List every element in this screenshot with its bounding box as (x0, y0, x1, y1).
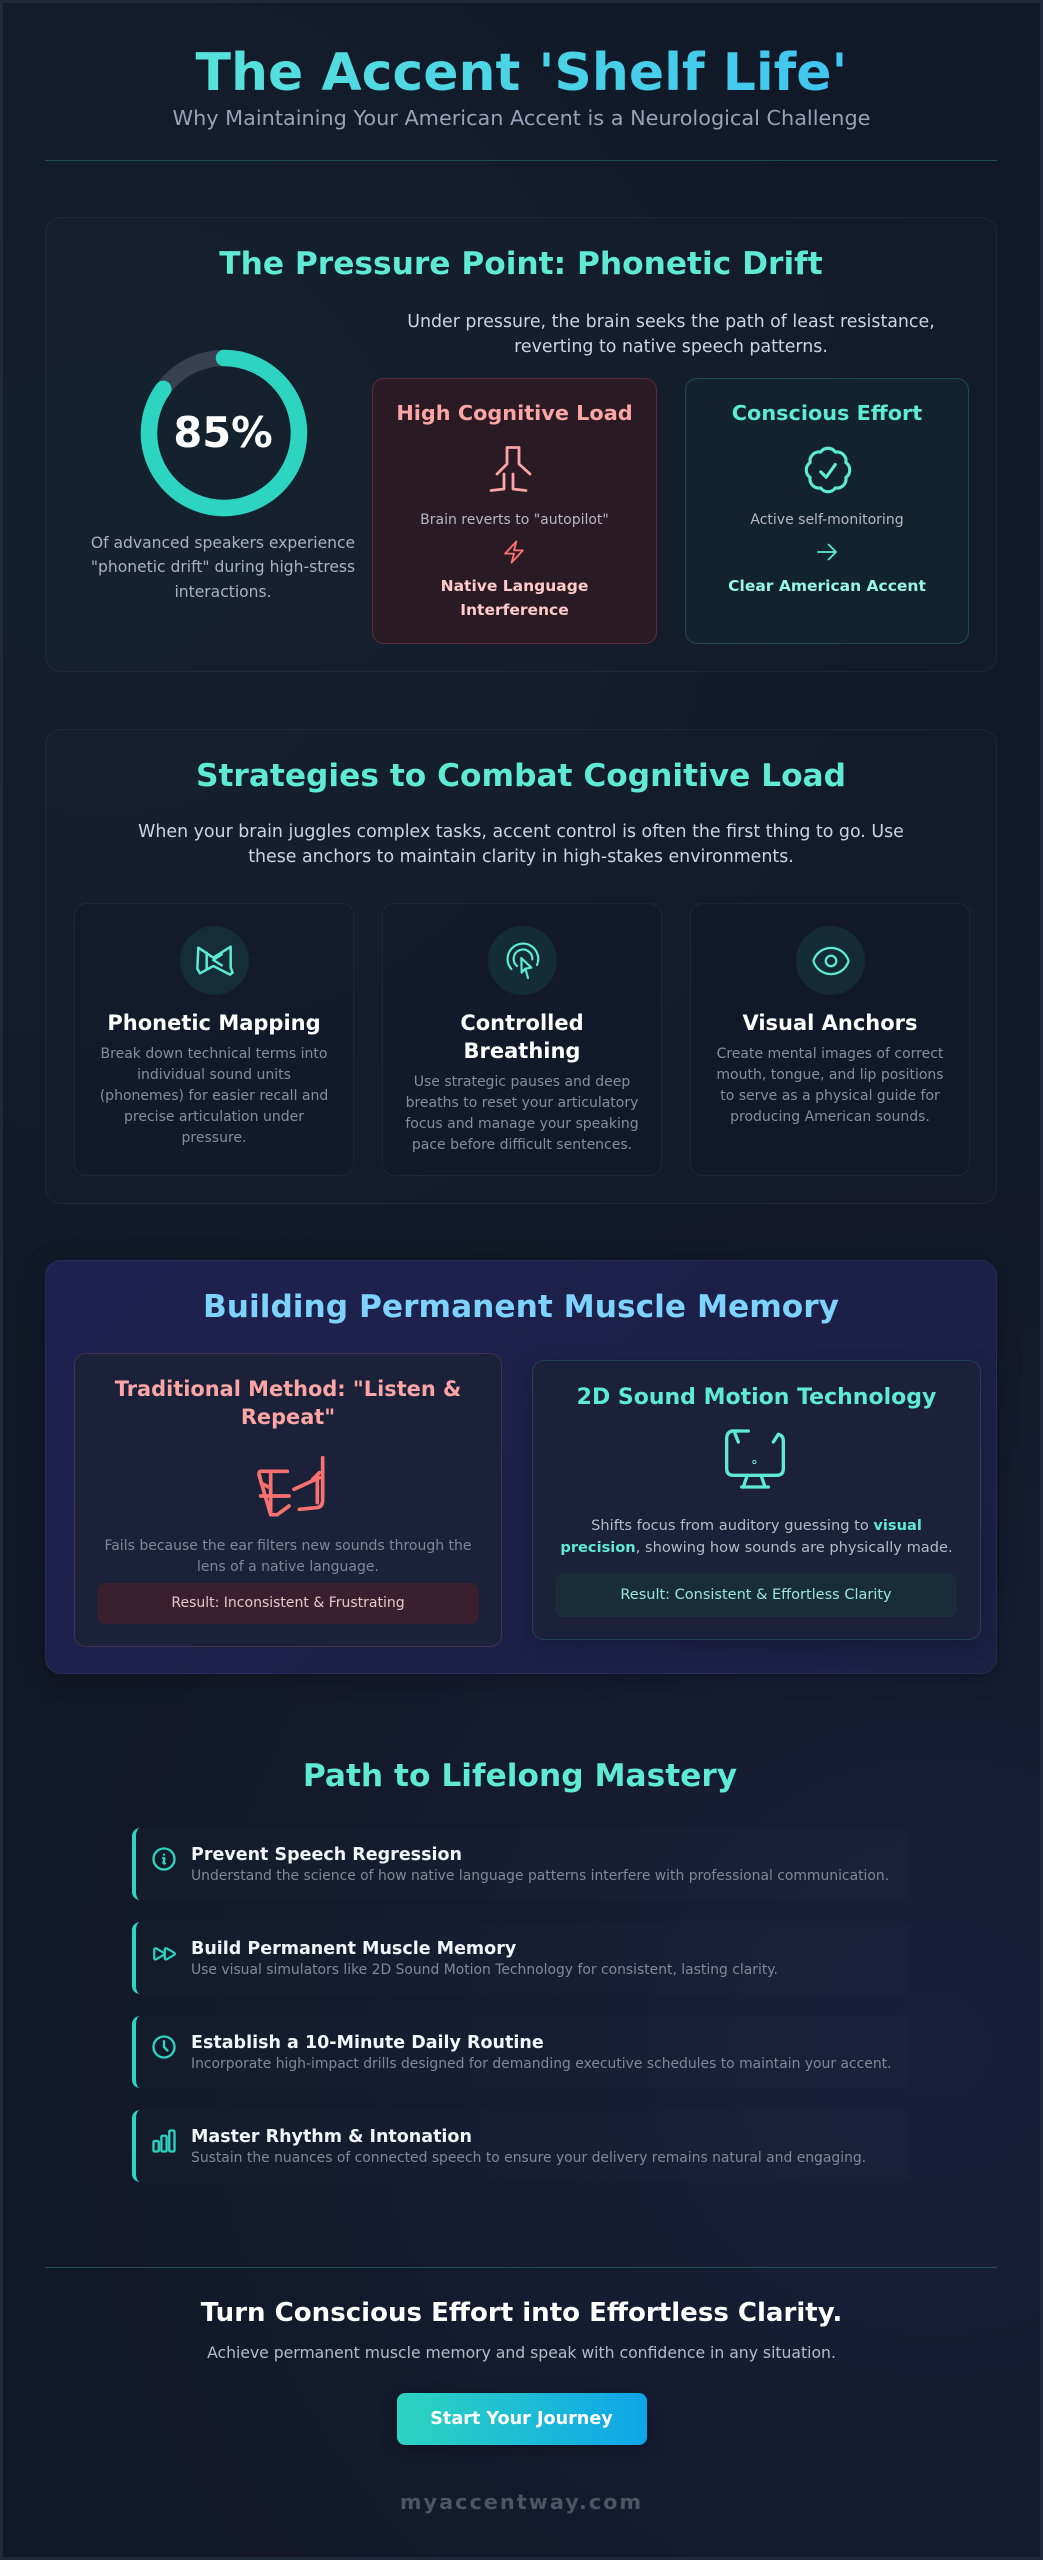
donut chart: 85% (140, 350, 308, 516)
icon: bolt (504, 540, 524, 564)
item title: Prevent Speech Regression (191, 1845, 462, 1865)
card description: pace before difficult sentences. (412, 1137, 632, 1153)
card description: focus and manage your speaking (405, 1116, 639, 1132)
button: start your journey: Start Your Journey (430, 2409, 613, 2429)
card description: Fails because the ear filters new sounds through the (104, 1538, 472, 1554)
result badge: Result: Inconsistent & Frustrating (171, 1595, 405, 1611)
card: conscious effort (685, 378, 969, 644)
card title (460, 1011, 584, 1063)
card description: Break down technical terms into (101, 1046, 327, 1062)
icon: cursor rays (488, 926, 557, 995)
card text: Active self-monitoring (750, 512, 904, 528)
card title: Visual Anchors (742, 1011, 918, 1035)
intro text: reverting to native speech patterns. (514, 336, 828, 356)
card description: to serve as a physical guide for (720, 1088, 940, 1104)
card description: Use strategic pauses and deep (414, 1074, 630, 1090)
card outcome: Interference (460, 601, 569, 619)
intro text: these anchors to maintain clarity in high-stakes environments. (248, 847, 794, 867)
card description: Shifts focus from auditory guessing to visual (591, 1517, 922, 1534)
item description: Sustain the nuances of connected speech to ensure your delivery remains natural and engaging. (191, 2150, 866, 2166)
icon: map (180, 926, 249, 995)
card outcome: Native Language (441, 577, 588, 595)
card description: pressure. (182, 1130, 246, 1146)
item title: Build Permanent Muscle Memory (191, 1939, 516, 1959)
icon: check badge (804, 446, 852, 494)
result badge: Result: Consistent & Effortless Clarity (620, 1587, 892, 1603)
list item: rhythm (132, 2110, 910, 2182)
card heading (114, 1377, 461, 1429)
donut caption: "phonetic drift" during high-stress (91, 558, 355, 576)
donut chart: 85%: 85% (173, 408, 273, 457)
card description: precision, showing how sounds are physically made. (560, 1539, 953, 1556)
panel: strategies (45, 729, 997, 1204)
card description: individual sound units (137, 1067, 291, 1083)
result badge (97, 1583, 479, 1624)
card title: Phonetic Mapping (107, 1011, 321, 1035)
card: phonetic mapping (74, 903, 354, 1176)
card description (104, 1538, 472, 1575)
card description: producing American sounds. (730, 1109, 930, 1125)
card description: mouth, tongue, and lip positions (716, 1067, 944, 1083)
item description: Use visual simulators like 2D Sound Motion Technology for consistent, lasting clarity. (191, 1962, 778, 1978)
card description: Create mental images of correct (717, 1046, 943, 1062)
panel: the pressure point (45, 217, 997, 672)
card description: lens of a native language. (197, 1559, 379, 1575)
card description (100, 1046, 328, 1146)
card heading: Conscious Effort (732, 401, 922, 425)
footer heading: Turn Conscious Effort into Effortless Clarity. (201, 2298, 842, 2328)
card description: (phonemes) for easier recall and (100, 1088, 328, 1104)
card description: precise articulation under (124, 1109, 304, 1125)
subtitle: Why Maintaining Your American Accent is a Neurological Challenge (173, 106, 870, 130)
heading: path to mastery: Path to Lifelong Mastery (303, 1758, 737, 1794)
list item: daily routine (132, 2016, 910, 2088)
icon: chart bars (152, 2129, 176, 2153)
card heading: High Cognitive Load (396, 401, 633, 425)
icon: forward (153, 1947, 176, 1960)
icon: monitor (725, 1429, 785, 1489)
card: visual anchors (690, 903, 970, 1176)
card: high cognitive load (372, 378, 657, 644)
card outcome (441, 577, 588, 619)
donut caption: interactions. (174, 583, 272, 601)
list item: prevent regression (132, 1828, 910, 1900)
card: 2d sound motion (532, 1360, 981, 1640)
result badge (555, 1573, 957, 1617)
intro text (407, 312, 935, 356)
card title: Breathing (464, 1039, 580, 1063)
card heading: 2D Sound Motion Technology (577, 1385, 936, 1410)
footer text: Achieve permanent muscle memory and speak with confidence in any situation. (207, 2343, 836, 2362)
icon: clock (152, 2035, 176, 2059)
heading: muscle memory: Building Permanent Muscle Memory (203, 1289, 839, 1325)
website domain: myaccentway.com (400, 2490, 643, 2514)
donut caption (91, 534, 355, 601)
card: controlled breathing (382, 903, 662, 1176)
card title: Controlled (460, 1011, 584, 1035)
icon: airways (490, 446, 532, 492)
panel: muscle memory (45, 1260, 997, 1674)
card text: Brain reverts to "autopilot" (420, 512, 609, 528)
item description: Understand the science of how native language patterns interfere with professional communication. (191, 1868, 889, 1884)
card description (716, 1046, 944, 1125)
icon: info (152, 1847, 176, 1871)
intro text: When your brain juggles complex tasks, accent control is often the first thing to go. Use (138, 822, 904, 842)
card description (405, 1074, 639, 1153)
icon: eye (796, 926, 865, 995)
donut caption: Of advanced speakers experience (91, 534, 355, 552)
card description: breaths to reset your articulatory (406, 1095, 638, 1111)
button: start your journey (396, 2393, 646, 2445)
icon: broken ear (257, 1456, 324, 1516)
list item: muscle memory (132, 1922, 910, 1994)
title: The Accent 'Shelf Life' (196, 43, 847, 103)
card outcome: Clear American Accent (728, 577, 926, 595)
heading: phonetic drift: The Pressure Point: Phonetic Drift (219, 246, 823, 282)
item title: Establish a 10-Minute Daily Routine (191, 2033, 544, 2053)
title (3, 40, 1040, 106)
heading: strategies: Strategies to Combat Cognitive Load (196, 758, 846, 794)
icon: arrow (817, 544, 837, 560)
item description: Incorporate high-impact drills designed for demanding executive schedules to maintain your accent. (191, 2056, 892, 2072)
card heading: Repeat" (241, 1405, 335, 1429)
intro text: Under pressure, the brain seeks the path of least resistance, (407, 312, 935, 332)
card heading: Traditional Method: "Listen & (115, 1377, 461, 1401)
item title: Master Rhythm & Intonation (191, 2127, 472, 2147)
intro text (138, 822, 904, 867)
card description (560, 1517, 953, 1556)
card: traditional method (74, 1353, 502, 1647)
